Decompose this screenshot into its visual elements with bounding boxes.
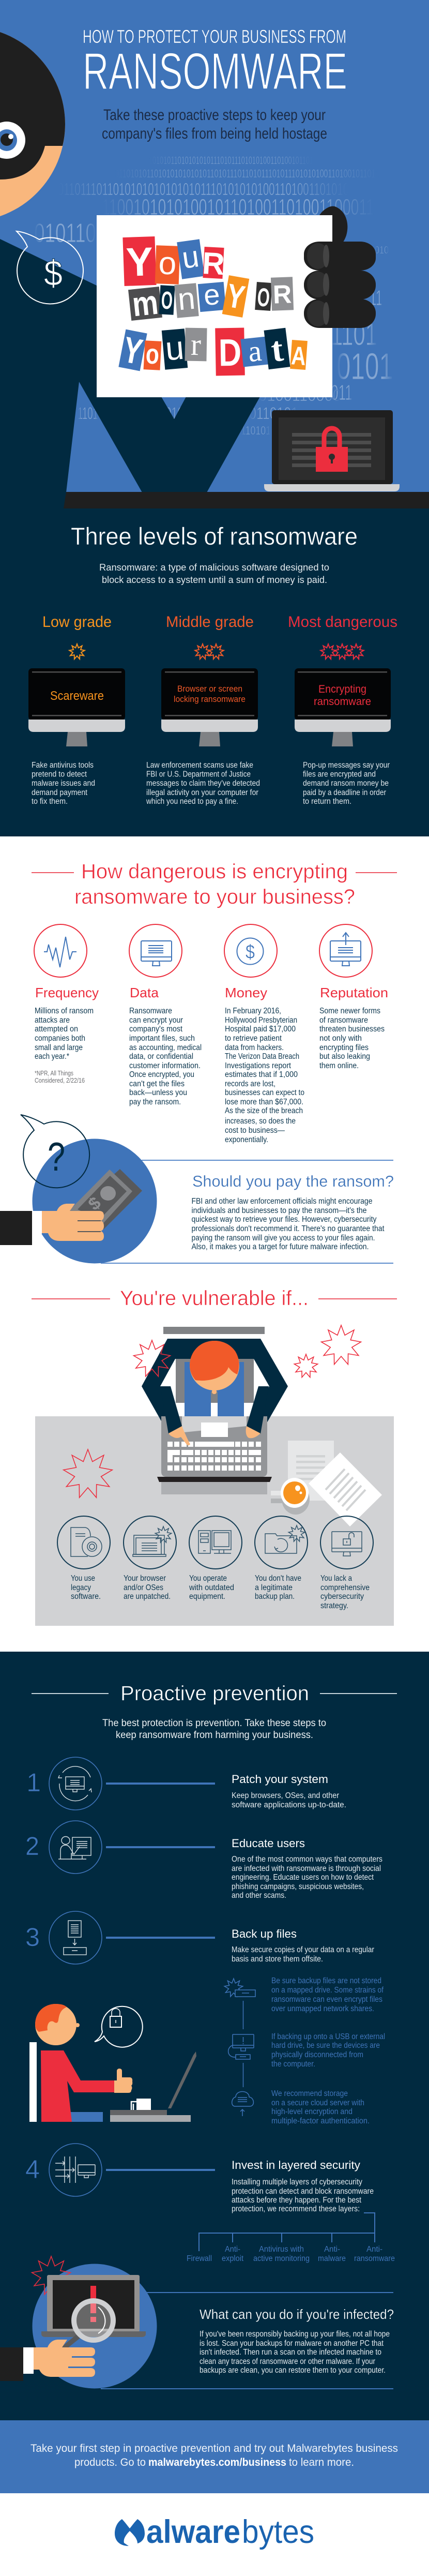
- column: low grade: Scareware: [50, 689, 104, 703]
- column: data: pay the ransom.: [129, 1098, 181, 1106]
- column: data: back—unless you: [129, 1088, 187, 1097]
- call to action text: Take your first step in proactive prevention and try out Malwarebytes business: [30, 2443, 398, 2454]
- villain head and mask: [0, 27, 65, 221]
- column: low grade: Low grade: [42, 613, 112, 631]
- illustration: magnifier over infected laptop: [0, 2256, 157, 2389]
- column: most dangerous: Encrypting: [318, 683, 366, 695]
- heading: you're vulnerable if: You're vulnerable if...: [120, 1287, 309, 1310]
- illustration: hand paying ransom: $: [85, 1193, 105, 1215]
- step 2: educate users: phishing campaigns, suspicious websites,: [232, 1882, 364, 1891]
- column: money: cost to business—: [225, 1126, 285, 1135]
- step 4: invest in layered security: protection can detect and block ransomware: [232, 2187, 374, 2196]
- column: data: customer information.: [129, 1061, 201, 1070]
- vulnerability: unpatched browser: Your browser: [124, 1574, 166, 1583]
- ransom letters: your money or your data: D: [218, 331, 242, 374]
- vulnerability: no cybersecurity strategy: [320, 1516, 373, 1610]
- security layers diagram: Anti-: [225, 2245, 240, 2254]
- illustration: worker at laptop from above: [142, 1339, 288, 1494]
- column: frequency: each year.*: [35, 1052, 69, 1061]
- step 2: educate users: One of the most common ways that computers: [232, 1855, 382, 1864]
- column: data: important files, such: [129, 1034, 195, 1043]
- binary code background: [34, 155, 393, 437]
- security layers diagram: Anti-: [324, 2245, 340, 2254]
- villain fist: [304, 242, 376, 328]
- column: reputation: of ransomware: [319, 1016, 368, 1025]
- ransom letters: your money or your data: n: [176, 281, 196, 317]
- security layers diagram: Anti-: [366, 2245, 382, 2254]
- vulnerability: no backup plan: a legitimate: [255, 1583, 293, 1592]
- backup tips: [224, 1976, 385, 2125]
- red bursts: [64, 1325, 361, 1497]
- ransom letters: your money or your data: Y: [120, 329, 146, 372]
- vulnerability: outdated equipment: You operate: [189, 1574, 227, 1583]
- column: most dangerous: paid by a deadline in order: [303, 788, 386, 797]
- column: most dangerous: Pop-up messages say your: [303, 761, 390, 770]
- step 3: back up files: Back up files: [232, 1927, 297, 1940]
- column: middle grade: Browser or screen: [177, 684, 242, 694]
- illustration: hand paying ransom: [0, 1139, 157, 1263]
- backup tips: physically disconnected from: [271, 2050, 363, 2059]
- column: data: can't get the files: [129, 1080, 185, 1088]
- column: frequency: Frequency: [35, 985, 99, 1000]
- column: most dangerous: demand ransom money be: [303, 779, 389, 788]
- column: reputation: Reputation: [320, 985, 388, 1000]
- hero subtitle: company's files from being held hostage: [102, 125, 327, 142]
- ransom letters: your money or your data: t: [269, 329, 285, 369]
- callout: what to do if infected: If you've been responsibly backing up your files, not all hope: [200, 2330, 390, 2339]
- binary code background: 1010101101010101011101011101010100110100101101: [149, 155, 313, 167]
- backup tips: high-level encryption and: [271, 2107, 353, 2116]
- column: frequency: [35, 985, 99, 1084]
- callout: should you pay the ransom: paying the ransom will give you access to your files again.: [191, 1234, 375, 1242]
- security layers diagram: exploit: [222, 2254, 244, 2263]
- column: data: as accounting, medical: [129, 1043, 202, 1052]
- column: money: increases, so does the: [225, 1117, 296, 1126]
- column: money: [225, 985, 304, 1144]
- column: reputation: Some newer forms: [319, 1007, 380, 1015]
- binary code background: 1101: [78, 404, 98, 423]
- column: data: company's most: [129, 1025, 183, 1034]
- call to action text: malwarebytes.com/business: [148, 2457, 286, 2468]
- icon: speech bubble with padlock: [95, 2006, 143, 2047]
- ransomware definition: [99, 562, 329, 585]
- column: frequency: attempted on: [35, 1025, 78, 1034]
- vulnerability: no cybersecurity strategy: comprehensive: [320, 1583, 370, 1592]
- column: data: data, or confidential: [129, 1052, 193, 1061]
- backup tips: over unmapped network shares.: [271, 2004, 374, 2013]
- step 2: educate users: are infected with ransomware is through social: [232, 1864, 381, 1873]
- icon: data monitor: [129, 924, 182, 977]
- ransom note sign: [97, 215, 332, 397]
- prevention intro: The best protection is prevention. Take these steps to: [102, 1717, 326, 1729]
- step 2: educate users: [25, 1821, 382, 1900]
- column: data: Once encrypted, you: [129, 1070, 194, 1079]
- column: frequency: Millions of ransom: [35, 1007, 94, 1015]
- vulnerability: legacy software: legacy: [71, 1583, 91, 1592]
- ransom letters: your money or your data: o: [158, 245, 177, 282]
- callout: what to do if infected: is lost. Scan your backups for malware on another PC that: [200, 2339, 384, 2348]
- icon: speech bubble with dollar sign: $: [44, 253, 63, 293]
- icon: reputation monitor with arrow: [319, 924, 372, 977]
- column: middle grade: messages to claim they've detected: [146, 779, 260, 788]
- column: money: As the size of the breach: [225, 1106, 303, 1115]
- column: money: to retrieve patient: [225, 1034, 282, 1043]
- column: money: data from hackers.: [225, 1043, 284, 1052]
- callout: should you pay the ransom: Should you pay the ransom?: [192, 1172, 394, 1190]
- callout: what to do if infected: clean any traces of ransomware or other malware. If your: [200, 2357, 375, 2366]
- column: reputation: them online.: [319, 1061, 359, 1070]
- column: low grade: [28, 613, 125, 806]
- column: money: exponentially.: [225, 1135, 268, 1144]
- ransom letters: your money or your data: r: [190, 327, 202, 362]
- vulnerability: no cybersecurity strategy: You lack a: [320, 1574, 352, 1583]
- ransom letters: your money or your data: a: [247, 334, 263, 368]
- binary code background: 0100110000: [258, 386, 341, 405]
- vulnerability: no backup plan: [255, 1516, 308, 1601]
- security layers diagram: ransomware: [354, 2254, 395, 2263]
- panel: three levels of ransomware: [0, 492, 429, 836]
- vulnerability: outdated equipment: [189, 1516, 242, 1601]
- laptop with red padlock: [264, 410, 400, 491]
- step 2: educate users: Educate users: [232, 1837, 305, 1850]
- vulnerability: legacy software: [57, 1516, 110, 1601]
- call to action text: products. Go to: [74, 2457, 146, 2468]
- column: reputation: encrypting files: [319, 1043, 369, 1052]
- icon: money dollar: [224, 924, 277, 977]
- security layers diagram: Antivirus with: [259, 2245, 304, 2254]
- step 2: educate users: 2: [25, 1832, 39, 1861]
- security layers diagram: active monitoring: [253, 2254, 310, 2263]
- step 4: invest in layered security: [25, 2144, 374, 2213]
- ransom letters: your money or your data: Y: [224, 277, 248, 316]
- step 1: patch your system: Keep browsers, OSes, and other: [232, 1791, 339, 1800]
- illustration: confident worker: [29, 2004, 196, 2122]
- vulnerability: legacy software: software.: [71, 1592, 101, 1601]
- binary code background: 011: [331, 380, 353, 405]
- ransom letters: your money or your data: o: [145, 338, 160, 370]
- column: middle grade: Middle grade: [166, 613, 254, 631]
- callout: what to do if infected: backups are clean, you can restore them to your computer.: [200, 2366, 386, 2375]
- column: most dangerous: [288, 613, 397, 806]
- ransom letters: your money or your data: [118, 236, 308, 376]
- column: data: Data: [130, 985, 159, 1000]
- callout: should you pay the ransom: quickest way to retrieve your files. However, cybersecurity: [191, 1215, 377, 1224]
- documents and coffee: [271, 1441, 382, 1526]
- callout: what to do if infected: What can you do if you're infected?: [200, 2307, 394, 2322]
- vulnerability: unpatched browser: are unpatched.: [124, 1592, 171, 1601]
- desk: [64, 492, 429, 508]
- column: money: businesses can expect to: [225, 1088, 304, 1097]
- column: most dangerous: files are encrypted and: [303, 770, 376, 779]
- binary code background: 1101: [331, 317, 377, 352]
- villain body and arms: [0, 239, 260, 492]
- ransom letters: your money or your data: e: [202, 278, 221, 311]
- backup tips: ransomware can even encrypt files: [271, 1995, 382, 2004]
- icon: money dollar: $: [246, 941, 255, 963]
- monitor lid top edge: [163, 1327, 265, 1334]
- logo: Malwarebytes: [115, 2514, 314, 2550]
- column: middle grade: locking ransomware: [174, 694, 246, 704]
- column: middle grade: Law enforcement scams use fake: [146, 761, 253, 770]
- ransom letters: your money or your data: O: [161, 287, 173, 315]
- column: most dangerous: to return them.: [303, 797, 351, 806]
- step 1: patch your system: [26, 1757, 346, 1810]
- column: frequency: small and large: [35, 1043, 83, 1052]
- column: most dangerous: ransomware: [314, 696, 371, 708]
- step 4: invest in layered security: 4: [25, 2155, 40, 2184]
- ransom letters: your money or your data: u: [180, 239, 201, 275]
- thumb behind sign: [319, 206, 347, 253]
- vulnerability: unpatched browser: [124, 1516, 176, 1601]
- vulnerability: no backup plan: backup plan.: [255, 1592, 295, 1601]
- step 3: back up files: Make secure copies of your data on a regular: [232, 1945, 374, 1954]
- panel: hero: [0, 0, 429, 492]
- security layers diagram: Firewall: [187, 2254, 212, 2263]
- binary code background: 010: [375, 245, 389, 256]
- binary code background: 110101: [241, 424, 271, 437]
- vulnerability: legacy software: You use: [71, 1574, 95, 1583]
- step 4: invest in layered security: Installing multiple layers of cybersecurity: [232, 2178, 362, 2186]
- column: money: records are lost,: [225, 1080, 275, 1088]
- heading: how dangerous: [32, 860, 397, 908]
- column: reputation: [319, 985, 388, 1070]
- binary code background: 11: [370, 286, 382, 310]
- binary code background: 0110101: [249, 404, 298, 423]
- ransomware definition: Ransomware: a type of malicious software designed to: [99, 562, 329, 573]
- panel: how dangerous: [0, 836, 429, 1652]
- ransomware definition: block access to a system until a sum of money is paid.: [102, 575, 327, 585]
- ransom letters: your money or your data: A: [290, 341, 307, 371]
- callout: should you pay the ransom: [191, 1172, 394, 1251]
- step 4: invest in layered security: Invest in layered security: [232, 2159, 361, 2171]
- logo: Malwarebytes: bytes: [242, 2514, 314, 2550]
- vulnerability: outdated equipment: with outdated: [189, 1583, 234, 1592]
- prevention intro: keep ransomware from harming your business.: [116, 1729, 313, 1741]
- step 3: back up files: basis and store them offsite.: [232, 1955, 323, 1964]
- column: data: Ransomware: [129, 1007, 172, 1015]
- icon: frequency heartbeat: [34, 924, 87, 977]
- step 2: educate users: engineering. Educate users on how to detect: [232, 1873, 374, 1882]
- ransom letters: your money or your data: m: [130, 283, 160, 323]
- column: money: Hollywood Presbyterian: [225, 1016, 297, 1025]
- ransom letters: your money or your data: u: [164, 329, 186, 367]
- callout: should you pay the ransom: Also, it makes you a target for future malware infection.: [191, 1242, 369, 1251]
- hero subtitle: [102, 107, 327, 142]
- column: frequency: attacks are: [35, 1016, 70, 1025]
- column: middle grade: FBI or U.S. Department of Justice: [146, 770, 251, 779]
- step 1: patch your system: 1: [26, 1768, 41, 1797]
- column: middle grade: which you need to pay a fine.: [146, 797, 238, 806]
- backup tips: on a secure cloud server with: [271, 2099, 364, 2107]
- column: low grade: malware issues and: [32, 779, 95, 788]
- column: money: Investigations report: [225, 1061, 292, 1070]
- backup tips: the computer.: [271, 2060, 315, 2069]
- prevention intro: [102, 1717, 326, 1741]
- column: frequency: *NPR, All Things: [35, 1069, 73, 1077]
- callout: should you pay the ransom: individuals and businesses to pay the ransom—it's the: [191, 1206, 367, 1215]
- column: reputation: but also leaking: [319, 1052, 370, 1061]
- column: middle grade: [146, 613, 260, 806]
- column: money: The Verizon Data Breach: [225, 1052, 299, 1061]
- binary code background: 010: [165, 404, 183, 423]
- icon: speech bubble with question mark: ?: [48, 1134, 65, 1179]
- panel: call to action footer: [0, 2420, 429, 2493]
- vulnerability: no backup plan: You don't have: [255, 1574, 301, 1583]
- step 2: educate users: and other scams.: [232, 1891, 286, 1900]
- step 1: patch your system: Patch your system: [232, 1773, 328, 1786]
- step 3: back up files: 3: [25, 1923, 40, 1952]
- column: low grade: to fix them.: [32, 797, 68, 806]
- column: money: lose more than $67,000.: [225, 1098, 303, 1106]
- ransom letters: your money or your data: R: [202, 246, 225, 281]
- column: money: Money: [225, 985, 267, 1000]
- backup tips: We recommend storage: [271, 2089, 348, 2098]
- column: low grade: demand payment: [32, 788, 88, 797]
- column: money: Hospital paid $17,000: [225, 1025, 296, 1034]
- backup tips: Be sure backup files are not stored: [271, 1976, 381, 1985]
- column: most dangerous: Most dangerous: [288, 613, 397, 631]
- heading: how dangerous: ransomware to your business?: [74, 886, 355, 908]
- rules: should you pay: [101, 1160, 393, 1263]
- backup tips: hard drive, be sure the devices are: [271, 2041, 380, 2050]
- column: frequency: Considered, 2/22/16: [35, 1076, 85, 1084]
- column: middle grade: illegal activity on your computer for: [146, 788, 258, 797]
- backup tips: on a mapped drive. Some strains of: [271, 1986, 384, 1995]
- backup tips: multiple-factor authentication.: [271, 2117, 370, 2125]
- callout: what to do if infected: [200, 2307, 394, 2375]
- column: data: can encrypt your: [129, 1016, 183, 1025]
- panel: proactive prevention: [0, 1652, 429, 2420]
- security layers diagram: [187, 2213, 395, 2263]
- binary code background: 0101: [336, 346, 393, 387]
- ransom letters: your money or your data: O: [256, 282, 271, 312]
- column: money: In February 2016,: [225, 1007, 281, 1015]
- column: reputation: threaten businesses: [319, 1025, 385, 1034]
- vulnerability: outdated equipment: equipment.: [189, 1592, 225, 1601]
- icon: speech bubble with dollar sign: [17, 231, 83, 304]
- call to action text: to learn more.: [289, 2457, 354, 2468]
- binary code background: 010110: [34, 218, 96, 248]
- step 1: patch your system: software applications up-to-date.: [232, 1801, 346, 1809]
- step 4: invest in layered security: protection, we recommend these layers:: [232, 2205, 360, 2213]
- step 4: invest in layered security: attacks before they happen. For the best: [232, 2196, 362, 2205]
- column: reputation: not only with: [319, 1034, 362, 1043]
- heading: three levels: Three levels of ransomware: [71, 522, 358, 550]
- vulnerability: no cybersecurity strategy: strategy.: [320, 1601, 348, 1610]
- callout: what to do if infected: isn't infected. Then run a scan on the infected machine to: [200, 2348, 381, 2357]
- desk panel: [35, 1416, 394, 1626]
- vulnerability: unpatched browser: and/or OSes: [124, 1583, 163, 1592]
- backup tips: If backing up onto a USB or external: [271, 2032, 385, 2041]
- logo: Malwarebytes: alware: [146, 2514, 240, 2550]
- column: low grade: pretend to detect: [32, 770, 87, 779]
- callout: should you pay the ransom: FBI and other law enforcement officials might encourage: [191, 1197, 372, 1206]
- security layers diagram: malware: [318, 2254, 346, 2263]
- ransom letters: your money or your data: Y: [125, 238, 154, 285]
- hero subtitle: Take these proactive steps to keep your: [103, 107, 326, 124]
- callout: should you pay the ransom: professionals don't recommend it. There's no guarantee that: [191, 1224, 385, 1233]
- rules: infected section: [101, 2293, 393, 2389]
- column: low grade: Fake antivirus tools: [32, 761, 94, 770]
- column: frequency: companies both: [35, 1034, 85, 1043]
- vulnerability: no cybersecurity strategy: cybersecurity: [320, 1592, 364, 1601]
- heading: proactive prevention: Proactive prevention: [120, 1682, 309, 1705]
- step 3: back up files: [25, 1911, 374, 1964]
- ransom letters: your money or your data: R: [272, 279, 292, 309]
- call to action text: [30, 2443, 398, 2468]
- icon: speech bubble with question mark: [21, 1115, 89, 1188]
- column: data: [129, 985, 202, 1106]
- column: money: estimates that if 1,000: [225, 1070, 298, 1079]
- heading: how dangerous: How dangerous is encrypting: [81, 860, 348, 883]
